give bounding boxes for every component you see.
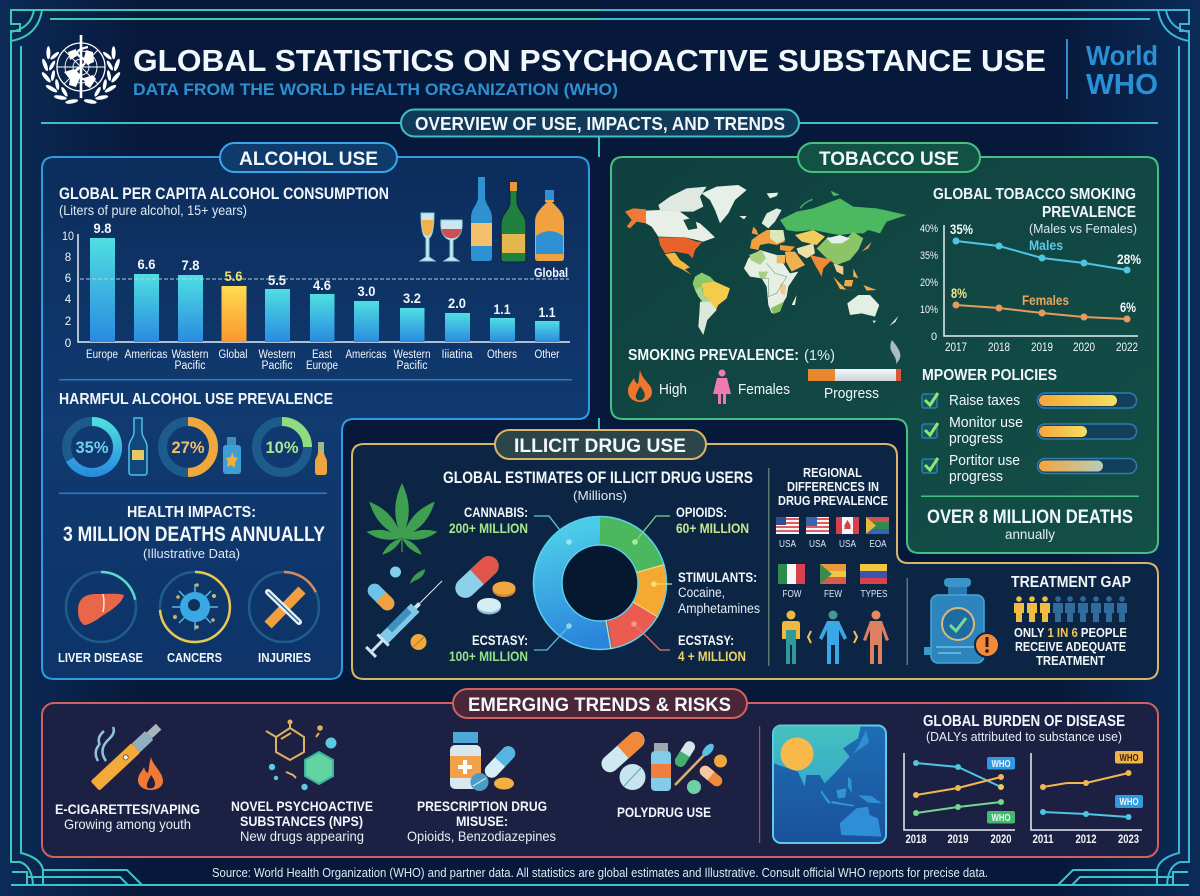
line chart: tobacco prevalence: 2020 bbox=[1073, 342, 1095, 354]
callout: stimulants: Cocaine, bbox=[678, 585, 725, 600]
icon: mixed drink can bbox=[223, 437, 241, 474]
donut: 35 percent bbox=[66, 421, 118, 472]
icon: molecule bbox=[266, 720, 336, 790]
flags row one: USA bbox=[809, 538, 826, 550]
bar chart: per capita alcohol: Pacific bbox=[396, 360, 428, 372]
callout: ecstasy 100+: 100+ MILLION bbox=[449, 649, 528, 664]
bar chart: per capita alcohol: Wastern bbox=[172, 349, 208, 361]
line chart: burden right: 2023 bbox=[1118, 834, 1139, 846]
line chart: tobacco prevalence bbox=[920, 221, 1141, 354]
bar chart: per capita alcohol: Pacific bbox=[174, 360, 206, 372]
callout: ecstasy 4+: 4 + MILLION bbox=[678, 649, 746, 664]
bar chart: per capita alcohol: 1.1 bbox=[538, 305, 556, 320]
policy row: monitor use: progress bbox=[949, 431, 1003, 447]
bar chart: per capita alcohol: 10 bbox=[62, 231, 74, 243]
illicit heading pill bbox=[495, 430, 706, 459]
health impacts text bbox=[59, 492, 327, 561]
source footer: Source: World Health Organization (WHO) and partner data. All statistics are global estimates and Illustrative. Consult official WHO reports for precise data. bbox=[212, 866, 988, 880]
per capita chart heading: GLOBAL PER CAPITA ALCOHOL CONSUMPTION bbox=[59, 184, 389, 203]
line chart: burden left: WHO bbox=[992, 758, 1010, 770]
flags row one: EOA bbox=[870, 538, 886, 550]
bar chart: per capita alcohol: 6 bbox=[65, 273, 71, 285]
NPS text: SUBSTANCES (NPS) bbox=[240, 813, 363, 829]
prescription text: PRESCRIPTION DRUG bbox=[417, 798, 547, 814]
legend: females bbox=[713, 370, 790, 404]
prescription text: Opioids, Benzodiazepines bbox=[407, 828, 556, 844]
line chart: burden right bbox=[1031, 751, 1143, 846]
flags row two: FOW bbox=[782, 588, 802, 600]
map panel: asia pacific bbox=[759, 726, 886, 843]
subtitle: DATA FROM THE WORLD HEALTH ORGANIZATION (WHO) bbox=[133, 80, 618, 99]
policy row: portitor use bbox=[922, 453, 1136, 485]
vaping text: E-CIGARETTES/VAPING bbox=[55, 801, 200, 817]
regional differences block bbox=[768, 465, 889, 666]
tobacco heading pill bbox=[798, 143, 980, 172]
icon: people row one in six bbox=[1014, 596, 1127, 622]
panel: emerging trends and risks bbox=[42, 689, 1158, 857]
line chart: burden left bbox=[904, 753, 1015, 846]
organisation wordmark: WHO bbox=[1086, 69, 1158, 101]
line chart: burden right: WHO bbox=[1120, 752, 1138, 764]
bar chart: per capita alcohol bbox=[62, 221, 570, 372]
burden of disease heading: (DALYs attributed to substance use) bbox=[926, 729, 1122, 744]
line chart: burden left: 2020 bbox=[990, 834, 1012, 846]
icon: liver disease bbox=[58, 572, 143, 665]
tobacco deaths callout bbox=[921, 496, 1139, 542]
icon: beer bottle bbox=[315, 442, 327, 475]
bar chart: per capita alcohol: Others bbox=[487, 349, 517, 361]
bar chart: per capita alcohol: East bbox=[312, 349, 333, 361]
tobacco heading pill: TOBACCO USE bbox=[819, 149, 959, 170]
regional differences block: REGIONAL bbox=[803, 465, 862, 480]
vaping text: Growing among youth bbox=[64, 816, 191, 832]
bar chart: per capita alcohol: 2 bbox=[65, 316, 71, 328]
line chart: tobacco prevalence: Females bbox=[1022, 292, 1069, 308]
donut: 27 percent: 27% bbox=[172, 438, 204, 457]
tobacco deaths callout: annually bbox=[1005, 526, 1055, 542]
icon: cancers: CANCERS bbox=[167, 650, 222, 665]
health impacts text: 3 MILLION DEATHS ANNUALLY bbox=[63, 523, 325, 546]
bar chart: per capita alcohol: 7.8 bbox=[182, 258, 200, 273]
world map: smoking prevalence bbox=[625, 185, 907, 335]
NPS text: NOVEL PSYCHOACTIVE bbox=[231, 798, 373, 814]
icon: people comparison bbox=[782, 610, 889, 664]
regional differences block: DIFFERENCES IN bbox=[787, 479, 879, 494]
policy row: monitor use: Monitor use bbox=[949, 415, 1023, 431]
legend: cigarette progress bbox=[808, 369, 901, 402]
legend: high: High bbox=[659, 382, 687, 398]
line chart: tobacco prevalence: 28% bbox=[1117, 251, 1141, 267]
emerging heading pill: EMERGING TRENDS & RISKS bbox=[468, 694, 731, 716]
flags row two: FEW bbox=[824, 588, 842, 600]
illicit chart heading bbox=[443, 469, 753, 503]
title: GLOBAL STATISTICS ON PSYCHOACTIVE SUBSTANCE USE bbox=[133, 43, 1046, 78]
prescription text bbox=[407, 798, 556, 844]
callout: stimulants bbox=[651, 570, 760, 616]
flags row one: USA bbox=[839, 538, 856, 550]
bar chart: per capita alcohol: 1.1 bbox=[494, 302, 511, 317]
organisation wordmark: World bbox=[1086, 40, 1158, 71]
flags row one bbox=[776, 517, 889, 550]
per capita chart subtitle: (Liters of pure alcohol, 15+ years) bbox=[59, 203, 247, 218]
bar chart: per capita alcohol: 2.0 bbox=[448, 296, 466, 311]
treatment gap block: TREATMENT GAP bbox=[1011, 574, 1131, 591]
policy row: portitor use: Portitor use bbox=[949, 453, 1020, 469]
callout: opioids: 60+ MILLION bbox=[676, 521, 749, 536]
line chart: tobacco prevalence: 2018 bbox=[988, 342, 1010, 354]
overview banner: OVERVIEW OF USE, IMPACTS, AND TRENDS bbox=[415, 114, 785, 134]
donut: 10 percent bbox=[256, 422, 308, 472]
bar chart: per capita alcohol: 3.0 bbox=[358, 284, 376, 299]
line chart: burden left: WHO bbox=[992, 812, 1010, 824]
bar chart: per capita alcohol: 4 bbox=[65, 294, 72, 306]
polydrug label: POLYDRUG USE bbox=[617, 804, 711, 820]
icon: syringe and pills bbox=[364, 552, 516, 659]
tobacco deaths callout: OVER 8 MILLION DEATHS bbox=[927, 507, 1133, 528]
bar chart: per capita alcohol: 6.6 bbox=[138, 257, 156, 272]
illicit heading pill: ILLICIT DRUG USE bbox=[514, 435, 686, 457]
NPS text: New drugs appearing bbox=[240, 828, 364, 844]
callout: ecstasy 4+: ECSTASY: bbox=[678, 633, 734, 648]
donut: 27 percent bbox=[162, 422, 214, 472]
callout: cannabis: CANNABIS: bbox=[464, 505, 528, 520]
bar chart: per capita alcohol: Pacific bbox=[262, 360, 293, 372]
donut chart: drug users bbox=[534, 516, 666, 650]
bar chart: per capita alcohol: 5.5 bbox=[268, 273, 286, 288]
policy row: raise taxes bbox=[922, 393, 1136, 409]
line chart: tobacco prevalence: 10% bbox=[920, 304, 938, 316]
icon: cancers bbox=[160, 572, 230, 665]
harmful use heading: HARMFUL ALCOHOL USE PREVALENCE bbox=[59, 391, 333, 408]
bar chart: per capita alcohol: Americas bbox=[124, 349, 168, 361]
callout: stimulants: Amphetamines bbox=[678, 601, 760, 616]
icon: smoke wisp bbox=[890, 340, 900, 364]
policy row: portitor use: progress bbox=[949, 469, 1003, 485]
alcohol heading pill: ALCOHOL USE bbox=[239, 149, 378, 170]
panel: illicit drug use bbox=[352, 430, 1158, 679]
tobacco chart heading: PREVALENCE bbox=[1042, 204, 1136, 221]
bar chart: per capita alcohol: Americas bbox=[346, 349, 387, 361]
line chart: tobacco prevalence: 2017 bbox=[945, 342, 967, 354]
overview banner bbox=[41, 110, 1158, 444]
bar chart: per capita alcohol: Global bbox=[218, 349, 248, 361]
bar chart: per capita alcohol: Western bbox=[394, 349, 430, 361]
line chart: tobacco prevalence: 0 bbox=[931, 331, 937, 343]
bar chart: per capita alcohol: Iiiatina bbox=[442, 349, 473, 361]
panel: alcohol use bbox=[42, 143, 589, 679]
callout: ecstasy 100+: ECSTASY: bbox=[472, 633, 528, 648]
line chart: burden left: 2018 bbox=[906, 834, 927, 846]
tobacco chart heading: (Males vs Females) bbox=[1029, 221, 1137, 236]
mpower policies heading: MPOWER POLICIES bbox=[922, 367, 1057, 384]
bar chart: per capita alcohol: Europe bbox=[86, 349, 118, 361]
illicit chart heading: GLOBAL ESTIMATES OF ILLICIT DRUG USERS bbox=[443, 469, 753, 487]
icon: prescription bottle and pills bbox=[450, 732, 518, 791]
treatment gap text bbox=[1014, 625, 1127, 668]
line chart: tobacco prevalence: Males bbox=[1029, 237, 1063, 253]
icon: blue bottle bbox=[129, 418, 147, 475]
callout: opioids bbox=[632, 505, 749, 545]
icon: polydrug pills bbox=[598, 728, 727, 794]
panel: tobacco use bbox=[611, 143, 1158, 553]
legend: cigarette progress: Progress bbox=[824, 386, 879, 402]
burden of disease heading bbox=[923, 713, 1125, 744]
treatment gap text: ONLY 1 IN 6 PEOPLE bbox=[1014, 625, 1127, 640]
bar chart: per capita alcohol: Other bbox=[534, 349, 560, 361]
callout: ecstasy 100+ bbox=[449, 623, 572, 664]
line chart: tobacco prevalence: 35% bbox=[920, 250, 938, 262]
bar chart: per capita alcohol: 9.8 bbox=[94, 221, 112, 236]
bar chart: per capita alcohol: 8 bbox=[65, 252, 71, 264]
line chart: tobacco prevalence: 40% bbox=[920, 223, 938, 235]
smoking prevalence legend heading: (1%) bbox=[804, 347, 835, 364]
treatment gap text: TREATMENT bbox=[1036, 653, 1105, 668]
flags row two: TYPES bbox=[860, 588, 888, 600]
treatment gap block bbox=[906, 574, 1131, 668]
line chart: tobacco prevalence: 35% bbox=[950, 221, 973, 237]
bar chart: per capita alcohol: 5.6 bbox=[224, 269, 243, 284]
line chart: tobacco prevalence: 8% bbox=[951, 285, 967, 301]
bar chart: per capita alcohol: Europe bbox=[306, 360, 338, 372]
illicit chart heading: (Millions) bbox=[573, 488, 627, 503]
line chart: burden right: 2012 bbox=[1076, 834, 1096, 846]
icon: vape pen bbox=[91, 722, 163, 791]
alcohol heading pill bbox=[220, 143, 397, 172]
icon: alcohol glasses and bottles bbox=[420, 177, 564, 262]
line chart: tobacco prevalence: 2019 bbox=[1031, 342, 1053, 354]
tobacco chart heading bbox=[933, 186, 1137, 236]
line chart: burden right: WHO bbox=[1120, 796, 1138, 808]
line chart: burden left: 2019 bbox=[948, 834, 968, 846]
line chart: tobacco prevalence: 2022 bbox=[1116, 342, 1138, 354]
prescription text: MISUSE: bbox=[456, 813, 508, 829]
callout: stimulants: STIMULANTS: bbox=[678, 570, 757, 585]
vaping text bbox=[55, 801, 200, 832]
health impacts text: (Illustrative Data) bbox=[143, 546, 240, 561]
icon: liver disease: LIVER DISEASE bbox=[58, 650, 143, 665]
icon: injuries: INJURIES bbox=[258, 650, 311, 665]
icon: cannabis leaf bbox=[365, 483, 439, 557]
line chart: burden right: 2011 bbox=[1032, 834, 1054, 846]
global reference label: Global bbox=[534, 265, 568, 280]
policy row: raise taxes: Raise taxes bbox=[949, 393, 1020, 409]
legend: high bbox=[628, 370, 687, 402]
treatment gap text: RECEIVE ADEQUATE bbox=[1015, 639, 1126, 654]
bar chart: per capita alcohol: 4.6 bbox=[313, 278, 331, 293]
smoking prevalence legend heading: SMOKING PREVALENCE: bbox=[628, 347, 799, 364]
tobacco chart heading: GLOBAL TOBACCO SMOKING bbox=[933, 186, 1136, 203]
flags row two bbox=[778, 564, 888, 600]
policy row: monitor use bbox=[922, 415, 1136, 447]
regional differences block: DRUG PREVALENCE bbox=[778, 493, 888, 508]
icon: medicine bottle with alert bbox=[924, 578, 999, 663]
bar chart: per capita alcohol: 3.2 bbox=[403, 291, 421, 306]
callout: cannabis: 200+ MILLION bbox=[449, 521, 528, 536]
legend: females: Females bbox=[738, 382, 790, 398]
organisation wordmark bbox=[1066, 39, 1158, 101]
callout: opioids: OPIOIDS: bbox=[676, 505, 727, 520]
bar chart: per capita alcohol: Western bbox=[258, 349, 296, 361]
WHO emblem logo bbox=[40, 35, 122, 105]
burden of disease heading: GLOBAL BURDEN OF DISEASE bbox=[923, 713, 1125, 730]
line chart: tobacco prevalence: 6% bbox=[1120, 299, 1136, 315]
flags row one: USA bbox=[779, 538, 796, 550]
icon: injuries bbox=[249, 572, 319, 665]
callout: cannabis bbox=[449, 505, 572, 545]
health impacts text: HEALTH IMPACTS: bbox=[127, 504, 256, 521]
bar chart: per capita alcohol: 0 bbox=[65, 338, 71, 350]
donut: 10 percent: 10% bbox=[266, 438, 298, 457]
donut: 35 percent: 35% bbox=[76, 438, 108, 457]
line chart: tobacco prevalence: 20% bbox=[920, 277, 938, 289]
NPS text bbox=[231, 798, 373, 844]
callout: ecstasy 4+ bbox=[631, 621, 746, 664]
